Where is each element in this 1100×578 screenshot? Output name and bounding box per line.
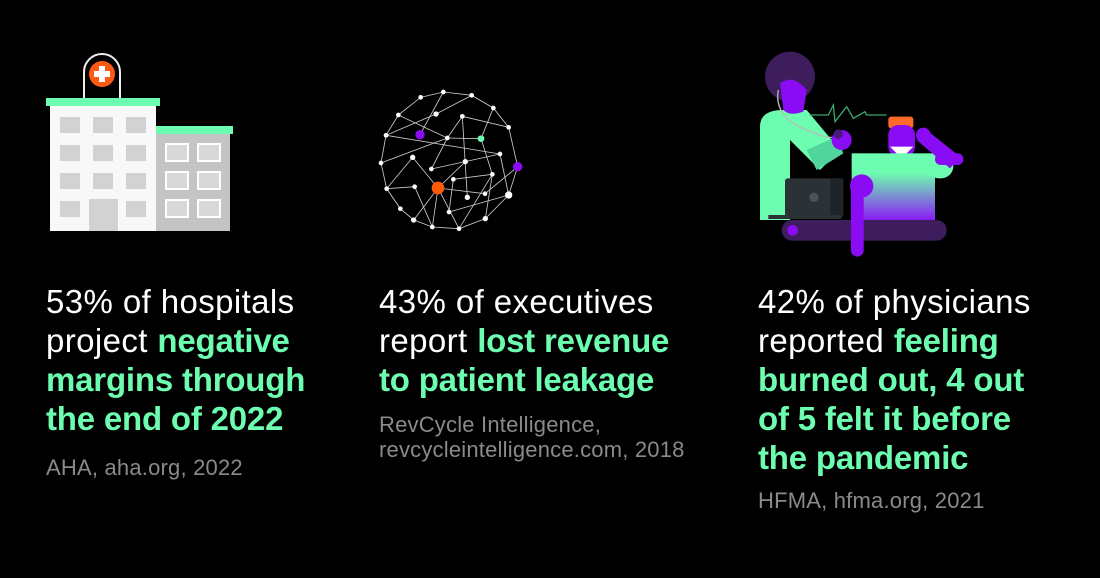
text: stat 3: of 5 felt it before: [758, 400, 1011, 437]
text: stat 3: the pandemic: [758, 439, 968, 476]
text: stat 3: burned out, 4 out: [758, 361, 1024, 398]
text: stat 3: 42% of physicians: [758, 283, 1031, 320]
icon: network sphere: [378, 90, 522, 231]
text: stat 2: report lost revenue: [379, 322, 669, 359]
icon: hospital: [46, 53, 233, 231]
text: stat 2: to patient leakage: [379, 361, 654, 398]
text: stat 1: 53% of hospitals: [46, 283, 295, 320]
source 1: AHA, aha.org, 2022: [46, 455, 243, 480]
text: stat 1: the end of 2022: [46, 400, 283, 437]
text: stat 3: [758, 283, 1031, 476]
text: stat 2: [379, 283, 669, 398]
text: stat 1: margins through: [46, 361, 305, 398]
source 3: HFMA, hfma.org, 2021: [758, 488, 985, 513]
text: stat 3: reported feeling: [758, 322, 999, 359]
text: stat 1: project negative: [46, 322, 290, 359]
text: stat 2: 43% of executives: [379, 283, 654, 320]
icon: doctor and patient: [760, 52, 964, 257]
source 2: RevCycle Intelligence,: [379, 412, 601, 437]
text: stat 1: [46, 283, 305, 437]
source 2: [379, 412, 685, 462]
source 2: revcycleintelligence.com, 2018: [379, 437, 685, 462]
